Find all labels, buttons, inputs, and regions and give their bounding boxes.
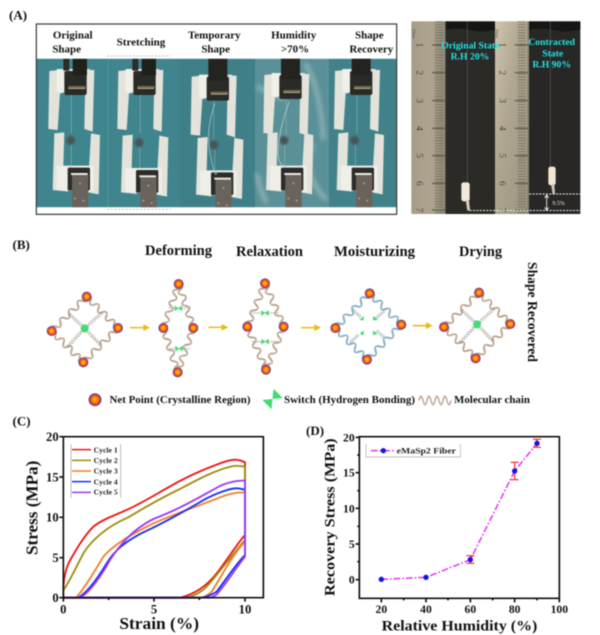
curve: Cycle 1 (63, 460, 245, 598)
state label: contracted: State (542, 49, 564, 60)
panel A: shape memory photo sequence (36, 24, 397, 214)
curve: Cycle 5 (63, 481, 245, 598)
panel A: ruler photos of fiber contraction: 20cm (494, 29, 499, 39)
panel C: stress-strain chart (23, 430, 263, 633)
data points (379, 441, 540, 582)
panel label: A: (A) (9, 8, 27, 22)
x axis tick labels (60, 603, 251, 617)
header strip (36, 24, 397, 59)
y axis tick labels: 15 (46, 470, 59, 484)
column headings (52, 29, 394, 55)
column headings: Shape (201, 43, 230, 55)
state label: original: R.H 20% (451, 51, 489, 62)
y axis tick labels: 5 (52, 551, 59, 565)
fiber specimen, contracted (548, 167, 556, 194)
y axis tick labels: 20 (46, 430, 59, 444)
photo: temporary shape (191, 59, 243, 212)
column headings: Recovery (349, 43, 394, 55)
column headings: Temporary (188, 29, 241, 41)
data line (381, 443, 537, 579)
panel label: B: (B) (12, 237, 30, 252)
y axis tick labels: 20 (343, 431, 355, 444)
y axis tick labels: 10 (46, 511, 59, 525)
step heading: Drying: Drying (459, 244, 503, 260)
legend: Cycle 1 (94, 445, 118, 454)
panel A: ruler photos of fiber contraction (411, 21, 580, 214)
y axis tick labels: 0 (349, 574, 355, 587)
label: molecular chain: Molecular chain (454, 395, 530, 406)
arrow (130, 324, 150, 331)
curves (63, 460, 245, 598)
legend: Cycle 3 (94, 467, 118, 476)
x axis tick labels: 10 (239, 603, 251, 617)
column headings: Stretching (117, 37, 166, 49)
state label: contracted (528, 37, 576, 71)
y axis title: Stress (MPa) (23, 461, 42, 555)
column headings: Humidity (271, 29, 317, 41)
y axis title: Recovery Stress (MPa) (323, 438, 339, 596)
axes frame (356, 437, 559, 602)
x axis tick labels (376, 603, 568, 616)
state label: contracted: Contracted (528, 37, 576, 48)
arrow (301, 324, 321, 331)
column headings: Shape (355, 29, 384, 41)
panel label: C: (C) (12, 414, 31, 428)
step heading: Moisturizing: Moisturizing (334, 244, 416, 260)
y axis tick labels: 10 (343, 502, 355, 515)
frame (36, 24, 397, 214)
x axis title: Relative Humidity (%) (382, 619, 537, 635)
legend: Cycle 2 (94, 456, 118, 465)
y axis tick labels (46, 430, 59, 605)
legend (71, 444, 121, 498)
x axis tick labels: 60 (465, 603, 476, 616)
side heading: Shape Recovered: Shape Recovered (524, 262, 539, 362)
diagram: drying, recovered network (439, 288, 515, 363)
error bars (379, 439, 541, 579)
column headings: >70% (281, 43, 309, 55)
photo: original shape (48, 59, 100, 207)
legend: Cycle 5 (94, 488, 118, 497)
panel B: network diagrams right part (301, 288, 515, 365)
x axis tick labels: 100 (551, 603, 568, 616)
label: switch: Switch (Hydrogen Bonding) (284, 395, 416, 406)
arrow (208, 324, 228, 331)
step heading: Deforming: Deforming (145, 243, 213, 259)
y axis tick labels: 15 (343, 467, 355, 480)
photo: stretching (117, 59, 168, 210)
footer strip (36, 207, 397, 214)
legend: Cycle 4 (94, 477, 118, 486)
x axis title: Strain (%) (119, 614, 199, 633)
panel B: network diagrams left part (47, 278, 289, 377)
diagram: original network (47, 292, 123, 367)
column headings: Shape (52, 43, 81, 55)
arrow (413, 322, 433, 329)
legend: eMaSp2 Fiber (397, 446, 456, 455)
state label: original (441, 40, 500, 62)
x axis tick labels: 40 (420, 603, 432, 616)
curve: Cycle 3 (63, 493, 245, 598)
axes frame (59, 437, 263, 602)
step heading: Relaxation: Relaxation (236, 244, 303, 260)
y axis tick labels: 0 (52, 591, 59, 605)
legend: network components (88, 389, 530, 409)
icon: net point (88, 393, 102, 406)
icon: molecular chain (419, 396, 451, 405)
diagram: deforming (158, 279, 198, 377)
diagram: moisturizing (330, 288, 406, 365)
photo: humidity above 70 percent (257, 57, 327, 207)
curve: Cycle 2 (63, 466, 245, 598)
contraction measure 9.5% (470, 194, 580, 210)
panel label: D: (D) (306, 423, 324, 438)
state label: contracted: R.H 90% (532, 60, 571, 71)
icon: switch (262, 389, 283, 409)
contraction measure 9.5%: 9.5% (552, 201, 565, 207)
legend (366, 444, 460, 457)
column headings: Original (53, 29, 93, 41)
x axis tick labels: 80 (509, 603, 521, 616)
x axis tick labels: 0 (60, 603, 66, 617)
label: net point: Net Point (Crystalline Region) (110, 395, 251, 406)
panel D: recovery stress chart (323, 431, 568, 635)
photo: shape recovery (334, 53, 384, 207)
state label: original: Original State (441, 40, 500, 51)
x axis tick labels: 5 (151, 603, 157, 617)
panel A: ruler photos of fiber contraction: 20cm (412, 29, 417, 39)
y axis tick labels: 5 (349, 538, 355, 551)
y axis tick labels (343, 431, 355, 587)
diagram: relaxation (242, 278, 289, 375)
curve: Cycle 4 (63, 488, 245, 598)
fiber specimen, original (461, 182, 470, 211)
x axis tick labels: 20 (376, 603, 387, 616)
